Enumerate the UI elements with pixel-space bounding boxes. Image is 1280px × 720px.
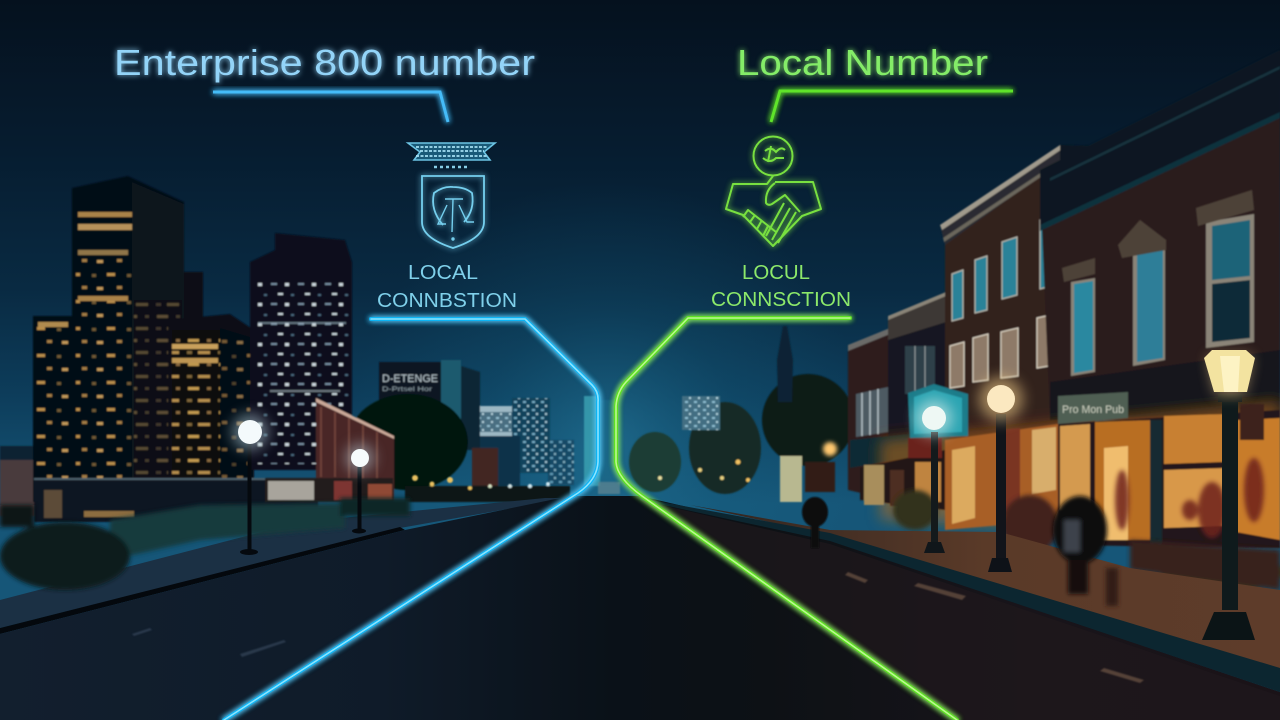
middle brick building [945, 160, 1095, 520]
small red block far [472, 448, 498, 490]
left low pink building [0, 446, 36, 516]
office block: lower left [33, 316, 77, 502]
panel: centre portal [584, 396, 620, 494]
panel: street lights in trees, distance [405, 475, 570, 502]
arrow: green heading bracket [771, 91, 1013, 122]
icon: green coin [754, 136, 792, 176]
teal sign [908, 384, 968, 438]
glass tower [250, 233, 352, 470]
small brick building [848, 328, 892, 500]
dark billboard building [379, 360, 480, 452]
trees [348, 394, 468, 490]
icon: green handshake [726, 176, 821, 246]
storefront right: Pro Mon Pub [1062, 404, 1124, 416]
lane markings [132, 572, 1144, 683]
upper windows [952, 216, 1055, 321]
red building [265, 398, 394, 502]
icon: cyclist [802, 497, 828, 548]
dark billboard building: D-ETENGE [382, 373, 438, 385]
text: connection green label: CONNSCTION [711, 289, 851, 311]
office block: lower right [168, 314, 254, 500]
icon: enterprise shield [422, 176, 484, 248]
panel: main street buildings [629, 50, 1280, 592]
awning band [1050, 350, 1280, 420]
dark brick corner building [1040, 62, 1280, 420]
icon: right street lamps [916, 350, 1255, 640]
text: connection blue label: CONNBSTION [377, 290, 517, 312]
text: LOCAL blue label: LOCAL [408, 262, 478, 284]
podium [34, 478, 318, 522]
storefront left [780, 438, 945, 510]
icon: left street lamps [232, 414, 374, 555]
trees right distance [629, 374, 854, 494]
arrow: green neon route [616, 318, 957, 720]
icon: enterprise banner [408, 143, 495, 167]
panel: right sidewalk and curb [640, 498, 1280, 692]
bushes [893, 490, 1280, 592]
storefront right [1058, 392, 1280, 548]
far city blocks [480, 398, 574, 486]
panel: road [0, 496, 1280, 720]
bay building [888, 292, 948, 510]
lower cream windows [950, 314, 1055, 388]
heading: Enterprise 800 number: Enterprise 800 number [114, 42, 535, 83]
shops glow [880, 400, 1280, 540]
heading: Local Number: Local Number [737, 42, 988, 83]
big windows [1062, 190, 1254, 376]
icon: blurred pedestrian [1053, 496, 1118, 606]
icon: lamp glow distant [823, 442, 837, 456]
panel: downtown skyline [0, 176, 574, 522]
arrow: blue heading bracket [213, 92, 448, 122]
storefront mid [945, 424, 1058, 530]
spire [777, 326, 793, 402]
dark billboard building: D-Prtsel Hor [382, 387, 432, 393]
office tower: tallest [72, 176, 203, 492]
panel: hedges and left sidewalk [0, 498, 570, 634]
arrow: blue neon route [224, 319, 598, 720]
text: LOCUL green label: LOCUL [742, 262, 810, 284]
